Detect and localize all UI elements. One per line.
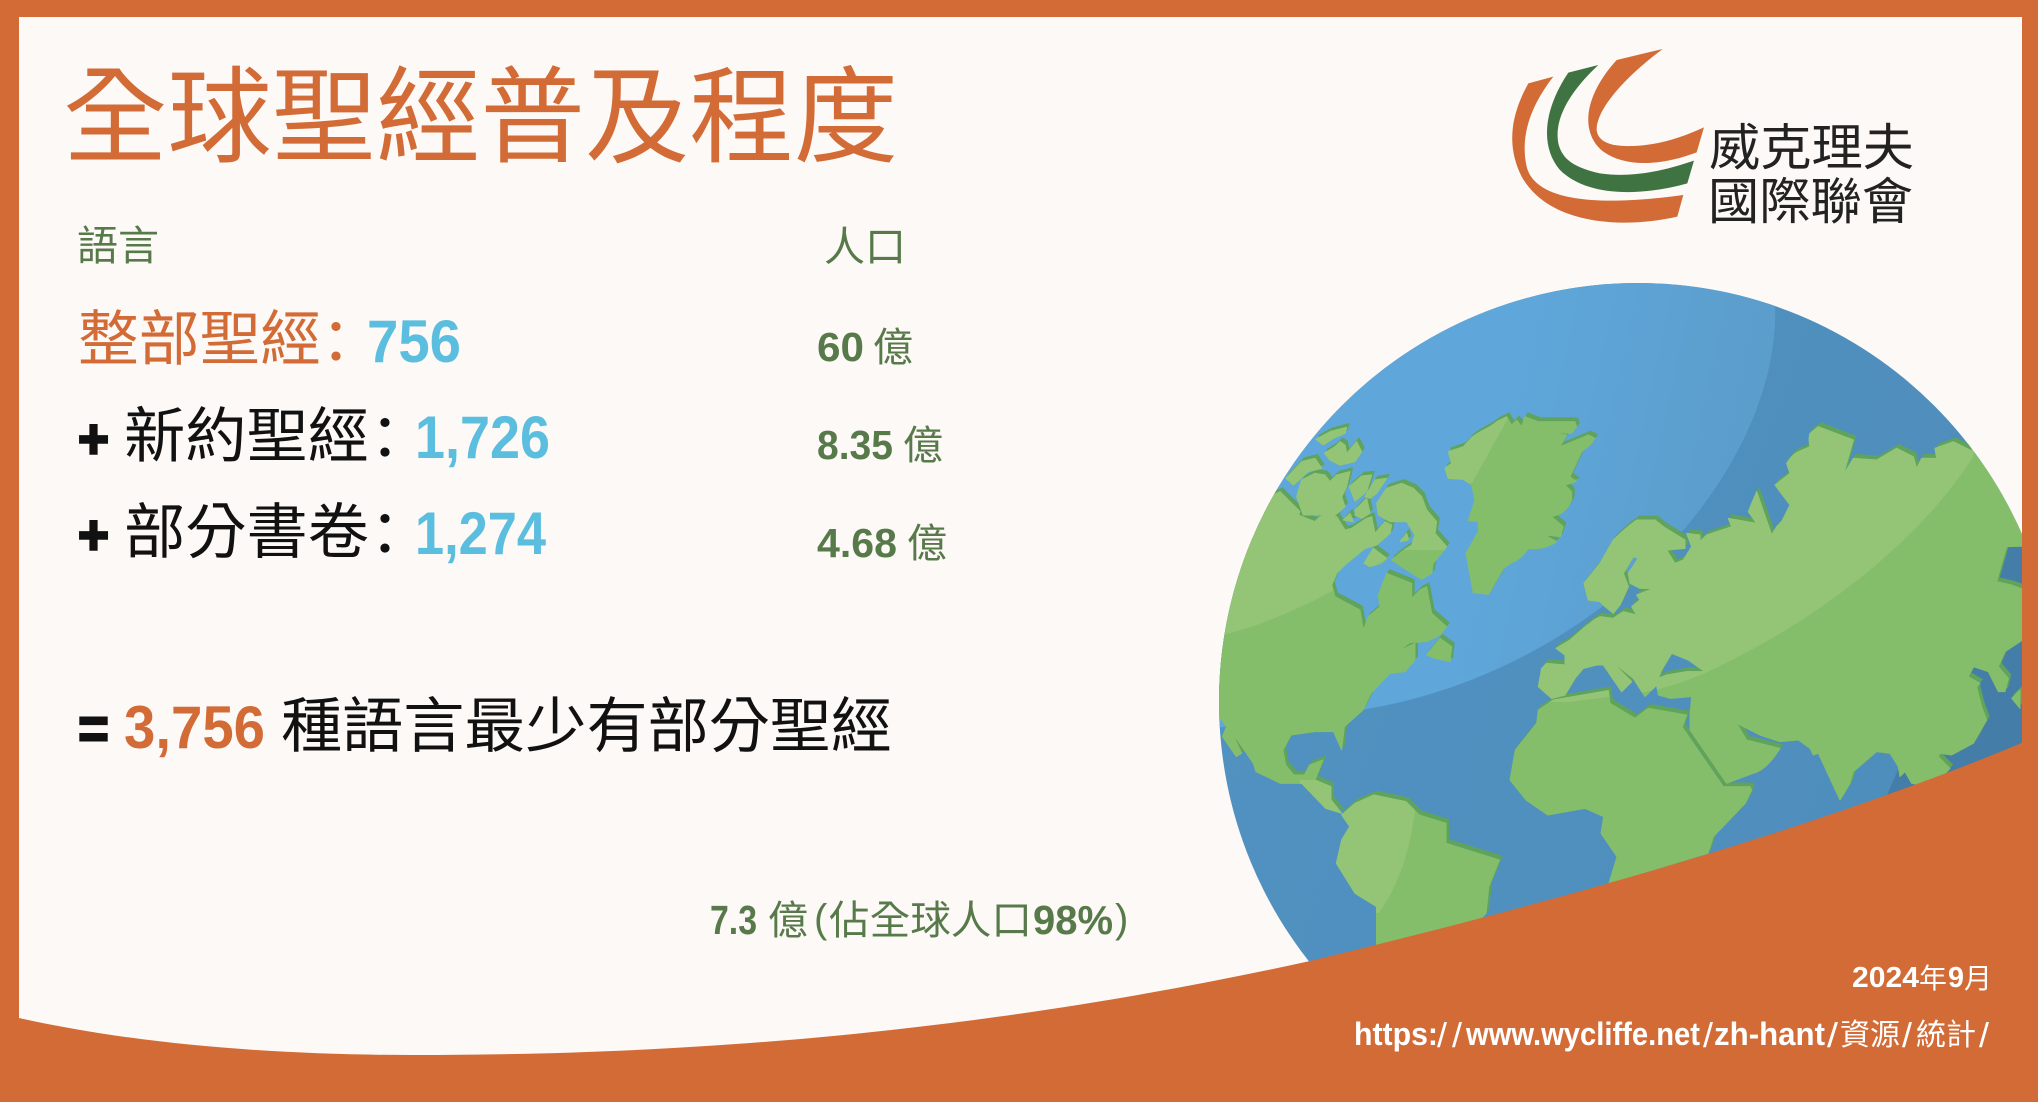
logo text: 威克理夫: [1709, 120, 1914, 176]
logo text: [1708, 120, 1914, 230]
source url: 資源: [1840, 1019, 1900, 1052]
total population: 佔全球人口: [829, 899, 1032, 943]
source url: /: [1979, 1017, 1990, 1055]
total line: 種語言最少有部分聖經: [281, 693, 892, 760]
ocean dark zone: [1888, 510, 2022, 794]
source url: https:: [1354, 1016, 1438, 1052]
logo: [1512, 49, 1914, 230]
date: 9: [1948, 962, 1964, 994]
row: portions: +: [78, 503, 109, 566]
row: portions: [78, 499, 547, 569]
population: 4.68: 億: [907, 522, 947, 566]
date: 2024: [1852, 962, 1919, 994]
row: portions: ：: [355, 502, 415, 569]
row: portions: 部分書卷: [124, 499, 369, 566]
total population: 億: [768, 899, 808, 943]
population: 60: 億: [873, 326, 913, 370]
total line: =: [78, 695, 109, 762]
source url: 統計: [1916, 1019, 1976, 1052]
population: 8.35: 8.35: [817, 422, 893, 468]
row: New Testament: 新約聖經: [124, 403, 369, 470]
total population: (: [814, 897, 828, 941]
row: New Testament: ：: [355, 406, 415, 473]
date: [1852, 962, 1992, 994]
logo text: 國際聯會: [1708, 174, 1913, 230]
source url: /: [1437, 1017, 1448, 1055]
source url: www.wycliffe.net: [1465, 1016, 1700, 1052]
continent highlight: [1224, 416, 1974, 913]
population: 8.35: [817, 422, 943, 468]
footer wave: [0, 736, 2038, 1102]
total population: 7.3: [710, 897, 757, 943]
total population: [710, 897, 1128, 943]
source url: /: [1452, 1017, 1463, 1055]
logo mark: [1512, 49, 1704, 223]
date: 年: [1919, 963, 1947, 994]
source url: [1354, 1016, 1990, 1055]
continents: [1219, 416, 2022, 945]
row: full Bible: ：: [306, 310, 366, 377]
land shadow: [1219, 412, 2022, 912]
globe illustration: [1219, 283, 2022, 962]
row: full Bible: 整部聖經: [78, 306, 321, 373]
source url: /: [1902, 1017, 1913, 1055]
total line: 3,756: [124, 694, 265, 761]
row: New Testament: +: [78, 407, 109, 470]
total population: ): [1115, 897, 1128, 941]
source url: /: [1703, 1017, 1714, 1055]
column heading: languages: 語言: [77, 223, 159, 269]
population: 4.68: [817, 520, 947, 566]
row: full Bible: 756: [367, 308, 461, 375]
population: 60: 60: [817, 324, 864, 370]
date: 月: [1964, 963, 1992, 994]
title: 全球聖經普及程度: [63, 60, 898, 177]
population: 4.68: 4.68: [817, 520, 897, 566]
ocean highlight: [1200, 270, 1775, 730]
total population: 98%: [1033, 897, 1113, 943]
population: 8.35: 億: [903, 424, 943, 468]
row: full Bible: [78, 306, 461, 377]
row: New Testament: 1,726: [415, 404, 550, 471]
source url: zh-hant: [1714, 1016, 1825, 1052]
source url: /: [1827, 1017, 1839, 1055]
population: 60: [817, 324, 913, 370]
row: New Testament: [78, 403, 550, 473]
row: portions: 1,274: [415, 500, 547, 567]
column heading: population: 人口: [824, 224, 906, 270]
